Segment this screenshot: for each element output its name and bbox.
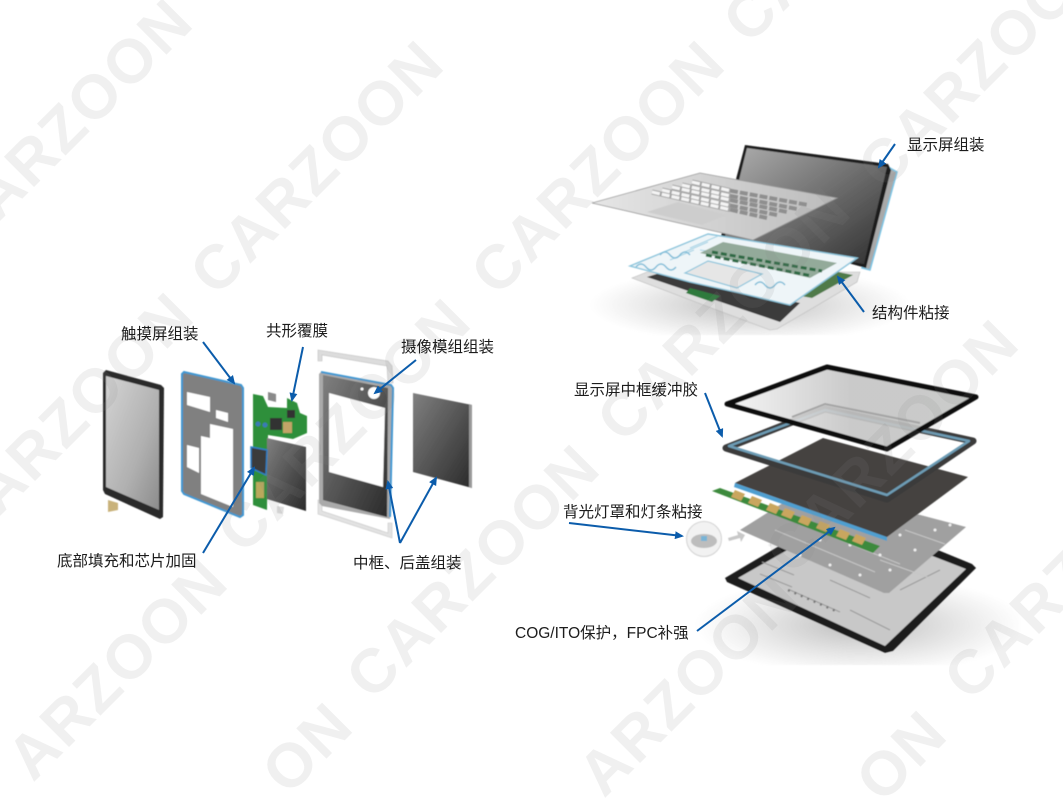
watermarks: ARZOON [0,546,241,793]
adhesive film layer [630,234,857,305]
reinforced chip [251,447,267,475]
label: backlight cover and light bar bonding: 背光灯罩和灯条粘接 [563,503,703,521]
label: conformal coating: 共形覆膜 [266,322,328,340]
connector arrow gray [728,531,745,542]
laptop exploded view [590,145,910,343]
arrow: underfill [203,468,254,553]
buffer frame [726,409,973,499]
ground shadow [612,284,887,335]
arrow: backlight bonding [569,523,682,536]
backlight detail circle [686,522,722,556]
lid back edge [862,168,897,270]
watermarks: CARZOON [204,286,484,566]
clear bottom trim [318,500,392,538]
label: camera module assembly: 摄像模组组装 [401,338,494,356]
watermarks: CARZOON [752,307,1032,587]
arrow: buffer adhesive [705,393,722,436]
watermarks: CARZOON [458,28,738,308]
arrow: touch screen [203,342,234,383]
circuit board [253,392,307,510]
backlight plate [740,486,966,593]
keyboard top cover [592,173,837,240]
back cover [413,393,472,488]
phone touch screen [103,370,164,519]
lid and screen [720,145,891,268]
touch screen adhesive panel [182,372,243,517]
display exploded view [686,367,1025,675]
label: display assembly: 显示屏组装 [907,136,985,154]
arrow: display assembly [879,144,895,167]
glass top frame [727,367,976,449]
arrow: COG protection [697,528,834,631]
battery [267,438,306,514]
arrow: structural bonding [838,277,864,312]
arrow: middle frame [388,482,400,543]
rear frame [725,510,976,653]
watermarks: CARZOON [333,432,613,712]
floor shadow [719,586,1001,665]
base [632,272,860,330]
label: COG/ITO protection and FPC reinforcement: COG/ITO保护，FPC补强 [515,624,689,642]
watermarks: CARZOON [584,175,864,455]
LED strip with pads [712,488,880,553]
middle frame [319,372,393,519]
LCD panel [734,438,968,541]
label: touch screen assembly: 触摸屏组装 [121,325,199,343]
label: underfill and chip reinforcement: 底部填充和芯片加固 [57,552,197,570]
arrow: conformal coating [292,347,303,400]
label: structural bonding: 结构件粘接 [872,304,950,322]
label: middle frame and back cover: 中框、后盖组装 [353,554,462,572]
arrow: back cover [400,478,436,543]
arrow: camera module [375,360,416,393]
label: display frame buffer adhesive: 显示屏中框缓冲胶 [574,381,698,399]
phone exploded view [103,350,472,538]
clear top trim [318,350,393,383]
watermarks: CARZOON [177,28,457,308]
